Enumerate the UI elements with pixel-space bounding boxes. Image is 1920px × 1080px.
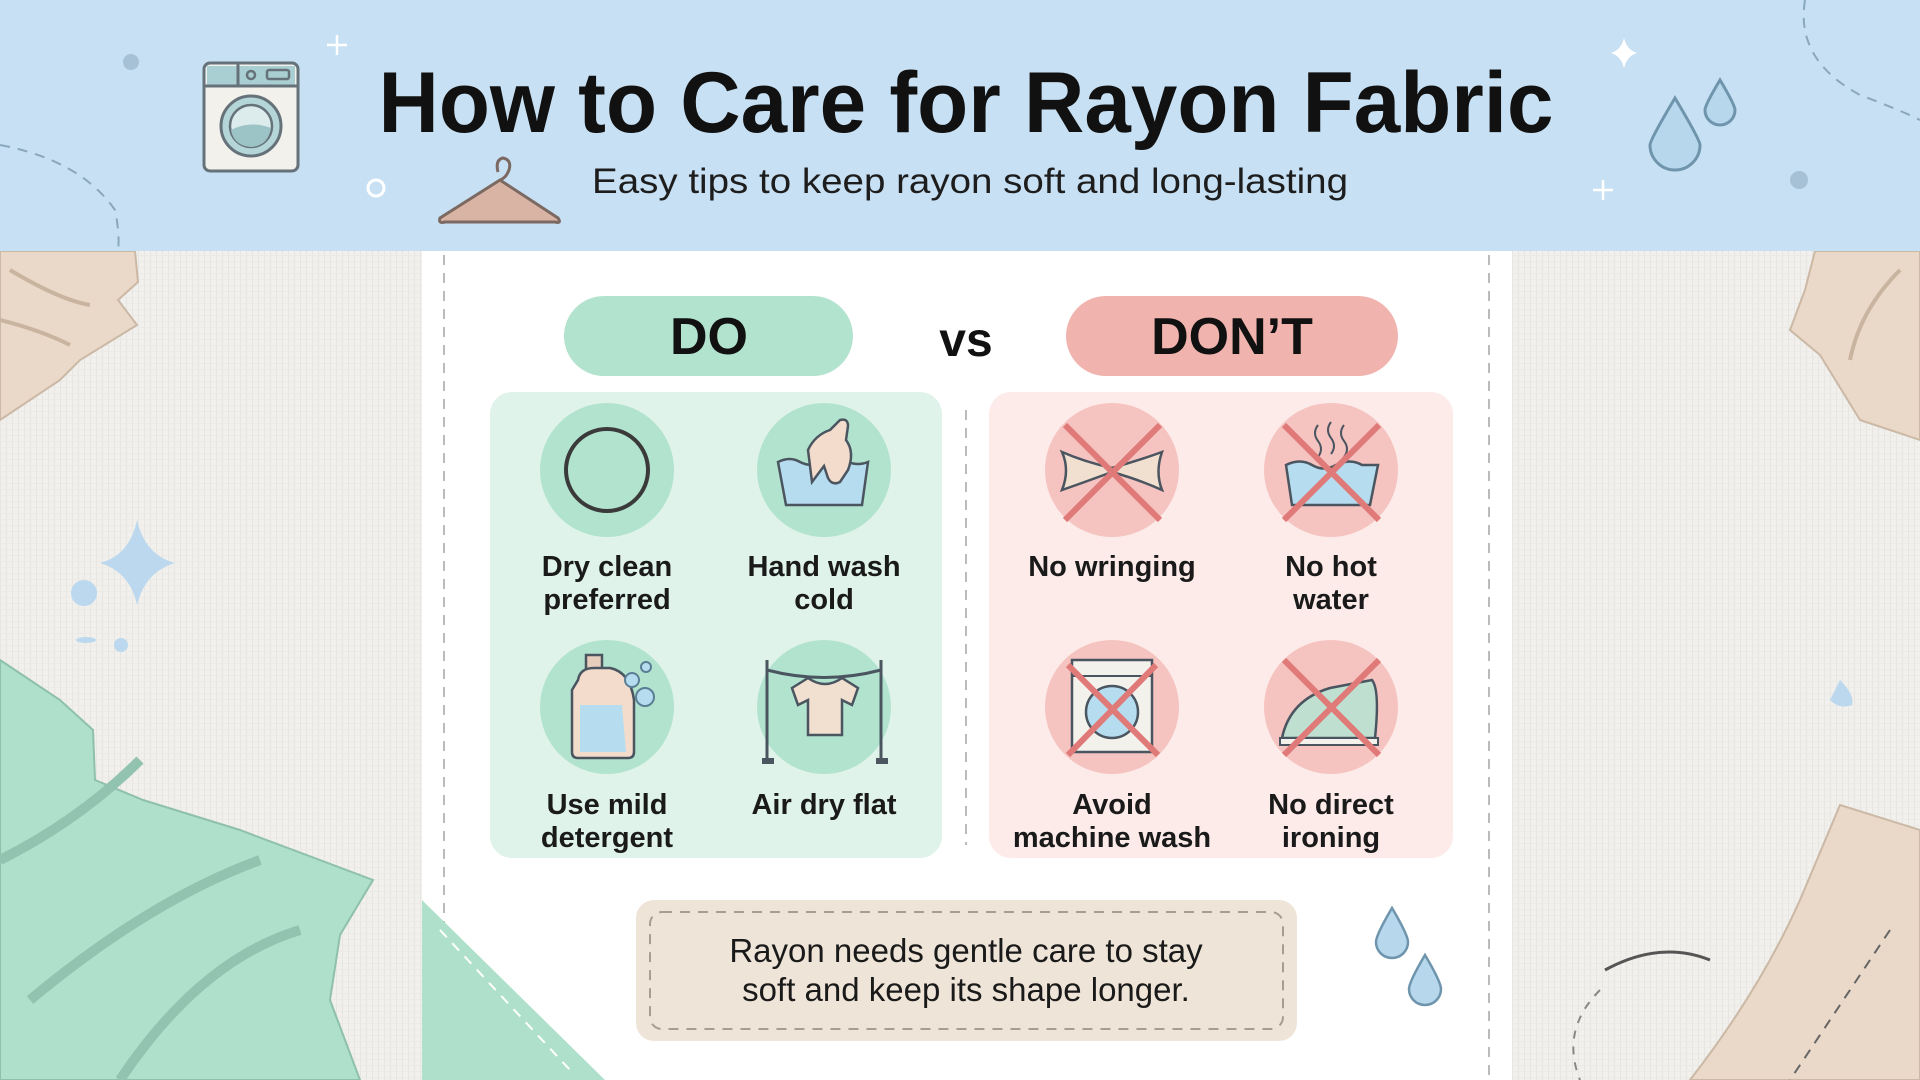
label: dry clean: Dry clean: [542, 551, 672, 583]
label: no hot water: No hot: [1285, 551, 1377, 583]
divider: [965, 410, 967, 845]
label: avoid machine wash: Avoid: [1072, 789, 1152, 821]
label: hand wash: cold: [794, 584, 854, 616]
icon: no wringing: [1045, 403, 1179, 537]
DO header pill: [564, 296, 853, 376]
header band: [0, 0, 1920, 251]
icon: hanger: [440, 158, 559, 222]
icon: hand wash: [757, 403, 891, 537]
label: avoid machine wash: machine wash: [1013, 822, 1211, 854]
label: mild detergent: Use mild: [547, 789, 667, 821]
icon: air dry: [757, 640, 891, 774]
decoration: green cloth bottom-left: [0, 660, 373, 1080]
label: hand wash: Hand wash: [747, 551, 901, 583]
icon: avoid machine wash: [1045, 640, 1179, 774]
label: dry clean: preferred: [543, 584, 671, 616]
icon: washing machine: [204, 63, 298, 171]
DON'T header pill: DON’T: [1151, 308, 1313, 366]
DO header pill: DO: [670, 308, 748, 366]
label: no wringing: No wringing: [1028, 551, 1196, 583]
subtitle: Easy tips to keep rayon soft and long-lasting: [592, 162, 1348, 201]
icon: water drops bottom: [1376, 908, 1441, 1005]
label: no direct ironing: ironing: [1282, 822, 1380, 854]
callout: note: [636, 900, 1297, 1041]
decoration: beige paper bottom-right: [1573, 805, 1920, 1080]
callout: note: Rayon needs gentle care to stay: [729, 932, 1203, 969]
label: no hot water: water: [1292, 584, 1369, 616]
label: no direct ironing: No direct: [1268, 789, 1394, 821]
vs label: vs: [939, 314, 993, 367]
decoration: beige cloth top-left: [0, 251, 138, 420]
label: air dry: Air dry flat: [751, 789, 897, 821]
panel: don't: [989, 392, 1453, 858]
decoration: small drop right: [1830, 680, 1852, 707]
panel: do: [490, 392, 942, 858]
label: mild detergent: detergent: [541, 822, 673, 854]
decoration: sparkle left: [71, 520, 175, 652]
icon: dry clean circle: [540, 403, 674, 537]
title: How to Care for Rayon Fabric: [378, 55, 1554, 151]
icon: detergent bottle: [540, 640, 674, 774]
decoration: beige cloth top-right: [1790, 251, 1920, 440]
main card: [422, 251, 1512, 1080]
icon: no ironing: [1264, 640, 1398, 774]
icon: no hot water: [1264, 403, 1398, 537]
DON'T header pill: [1066, 296, 1398, 376]
callout: note: soft and keep its shape longer.: [742, 971, 1190, 1008]
icon: water drops header: [1650, 80, 1735, 170]
